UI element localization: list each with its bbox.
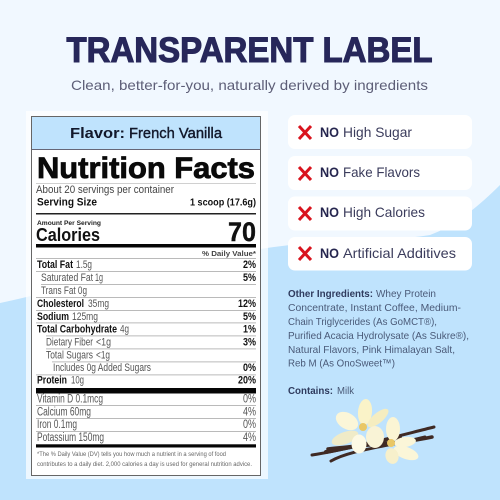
row: trans fat: Trans Fat 0g [41, 285, 87, 297]
row: cholesterol [37, 298, 256, 310]
row: saturated fat: 1g [95, 272, 103, 284]
footnote: *The % Daily Value (DV) tells you how much a nutrient in a serving of food [37, 452, 226, 458]
flavor header: Flavor: [70, 125, 125, 142]
servings: Serving Size [37, 196, 97, 208]
other ingredients text [288, 288, 469, 370]
row: sodium: 5% [243, 311, 256, 323]
heading: nutrition facts: Nutrition Facts [37, 152, 255, 185]
footnote: contributes to a daily diet. 2,000 calories a day is used for general nutrition advice. [37, 462, 252, 468]
row: total sugars: <1g [96, 350, 110, 362]
row: added sugars: 0% [243, 362, 256, 374]
contains text: Contains: [288, 385, 333, 397]
panel: no artificial additives [288, 237, 472, 270]
row: total carbohydrate: 1% [243, 324, 256, 336]
contains text: Milk [337, 385, 355, 397]
row: total fat [37, 259, 256, 271]
other ingredients text: Reb M (As OnoSweet™) [288, 358, 395, 370]
illustration: vanilla flowers and pods [312, 398, 434, 465]
servings: 1 scoop (17.6g) [190, 196, 256, 208]
other ingredients text: Other Ingredients: [288, 288, 373, 300]
footnote [37, 452, 252, 468]
calories: % Daily Value* [202, 249, 256, 258]
other ingredients text: Purified Acacia Hydrolysate (As Sukre®), [288, 330, 469, 342]
panel: no fake flavors [288, 156, 472, 190]
calories: Amount Per Serving [37, 221, 101, 227]
row: iron: 0% [243, 419, 256, 431]
icon: red x [299, 167, 311, 180]
row: cholesterol: 35mg [88, 298, 109, 310]
row: sodium: 125mg [72, 311, 98, 323]
calories: 70 [228, 217, 256, 247]
row: total fat: 1.5g [76, 259, 92, 271]
thick bar [36, 444, 256, 448]
row: calcium [37, 406, 256, 418]
panel: no high calories: NO [320, 204, 339, 220]
row: protein: 10g [71, 374, 84, 386]
icon: red x [299, 247, 311, 260]
row: total carbohydrate: 4g [120, 324, 129, 336]
panel: no high calories: High Calories [343, 204, 425, 220]
row: vitamin d: 0% [243, 394, 256, 406]
row: saturated fat: Saturated Fat [41, 272, 93, 284]
row: dietary fiber [46, 336, 256, 348]
row: total sugars: Total Sugars [46, 350, 93, 362]
panel: no high sugar: High Sugar [343, 124, 412, 140]
row: dietary fiber: <1g [96, 336, 111, 348]
row: protein [37, 374, 256, 386]
row: potassium: 4% [243, 432, 256, 444]
thick bar [36, 388, 256, 394]
row: calcium: Calcium 60mg [37, 406, 91, 418]
calories [36, 217, 256, 258]
row: calcium: 4% [243, 406, 256, 418]
icon: red x [299, 126, 311, 139]
title: TRANSPARENT LABEL [66, 31, 432, 70]
other ingredients text: Concentrate, Instant Coffee, Medium- [288, 302, 461, 314]
panel: no artificial additives: NO [320, 245, 339, 261]
row: protein: 20% [238, 374, 256, 386]
row: total fat: 2% [243, 259, 256, 271]
other ingredients text: Whey Protein [376, 288, 436, 300]
row: sodium: Sodium [37, 311, 69, 323]
row: cholesterol: Cholesterol [37, 298, 84, 310]
servings [36, 183, 256, 214]
subtitle: Clean, better-for-you, naturally derived by ingredients [71, 77, 428, 93]
row: vitamin d [37, 394, 256, 406]
panel: nutrition label [26, 111, 268, 479]
panel: no high sugar: NO [320, 124, 339, 140]
row: vitamin d: Vitamin D 0.1mcg [37, 394, 103, 406]
row: potassium [37, 432, 256, 444]
row: saturated fat [41, 272, 256, 284]
icon: red x [299, 207, 311, 220]
row: total fat: Total Fat [37, 259, 73, 271]
panel: no high sugar [288, 115, 472, 149]
flavor header: French Vanilla [129, 126, 223, 142]
row: saturated fat: 5% [243, 272, 256, 284]
row: total carbohydrate: Total Carbohydrate [37, 324, 117, 336]
panel: no fake flavors: NO [320, 164, 339, 180]
calories: Calories [36, 225, 100, 245]
row: sodium [37, 311, 256, 323]
row: dietary fiber: 3% [243, 336, 256, 348]
servings: About 20 servings per container [36, 184, 174, 196]
other ingredients text: Natural Flavors, Pink Himalayan Salt, [288, 344, 455, 356]
row: dietary fiber: Dietary Fiber [46, 336, 93, 348]
row: potassium: Potassium 150mg [37, 432, 104, 444]
nutrient rows [36, 258, 256, 432]
flavor header [32, 117, 260, 150]
row: iron [37, 419, 256, 431]
row: iron: Iron 0.1mg [37, 419, 77, 431]
panel: no fake flavors: Fake Flavors [343, 164, 420, 180]
row: cholesterol: 12% [238, 298, 256, 310]
row: total carbohydrate [37, 324, 256, 336]
row: added sugars [53, 362, 256, 374]
other ingredients text: Chain Triglycerides (As GoMCT®), [288, 316, 437, 328]
row: added sugars: Includes 0g Added Sugars [53, 362, 151, 374]
panel: no artificial additives: Artificial Additives [343, 245, 456, 261]
row: protein: Protein [37, 374, 67, 386]
panel: no high calories [288, 196, 472, 230]
